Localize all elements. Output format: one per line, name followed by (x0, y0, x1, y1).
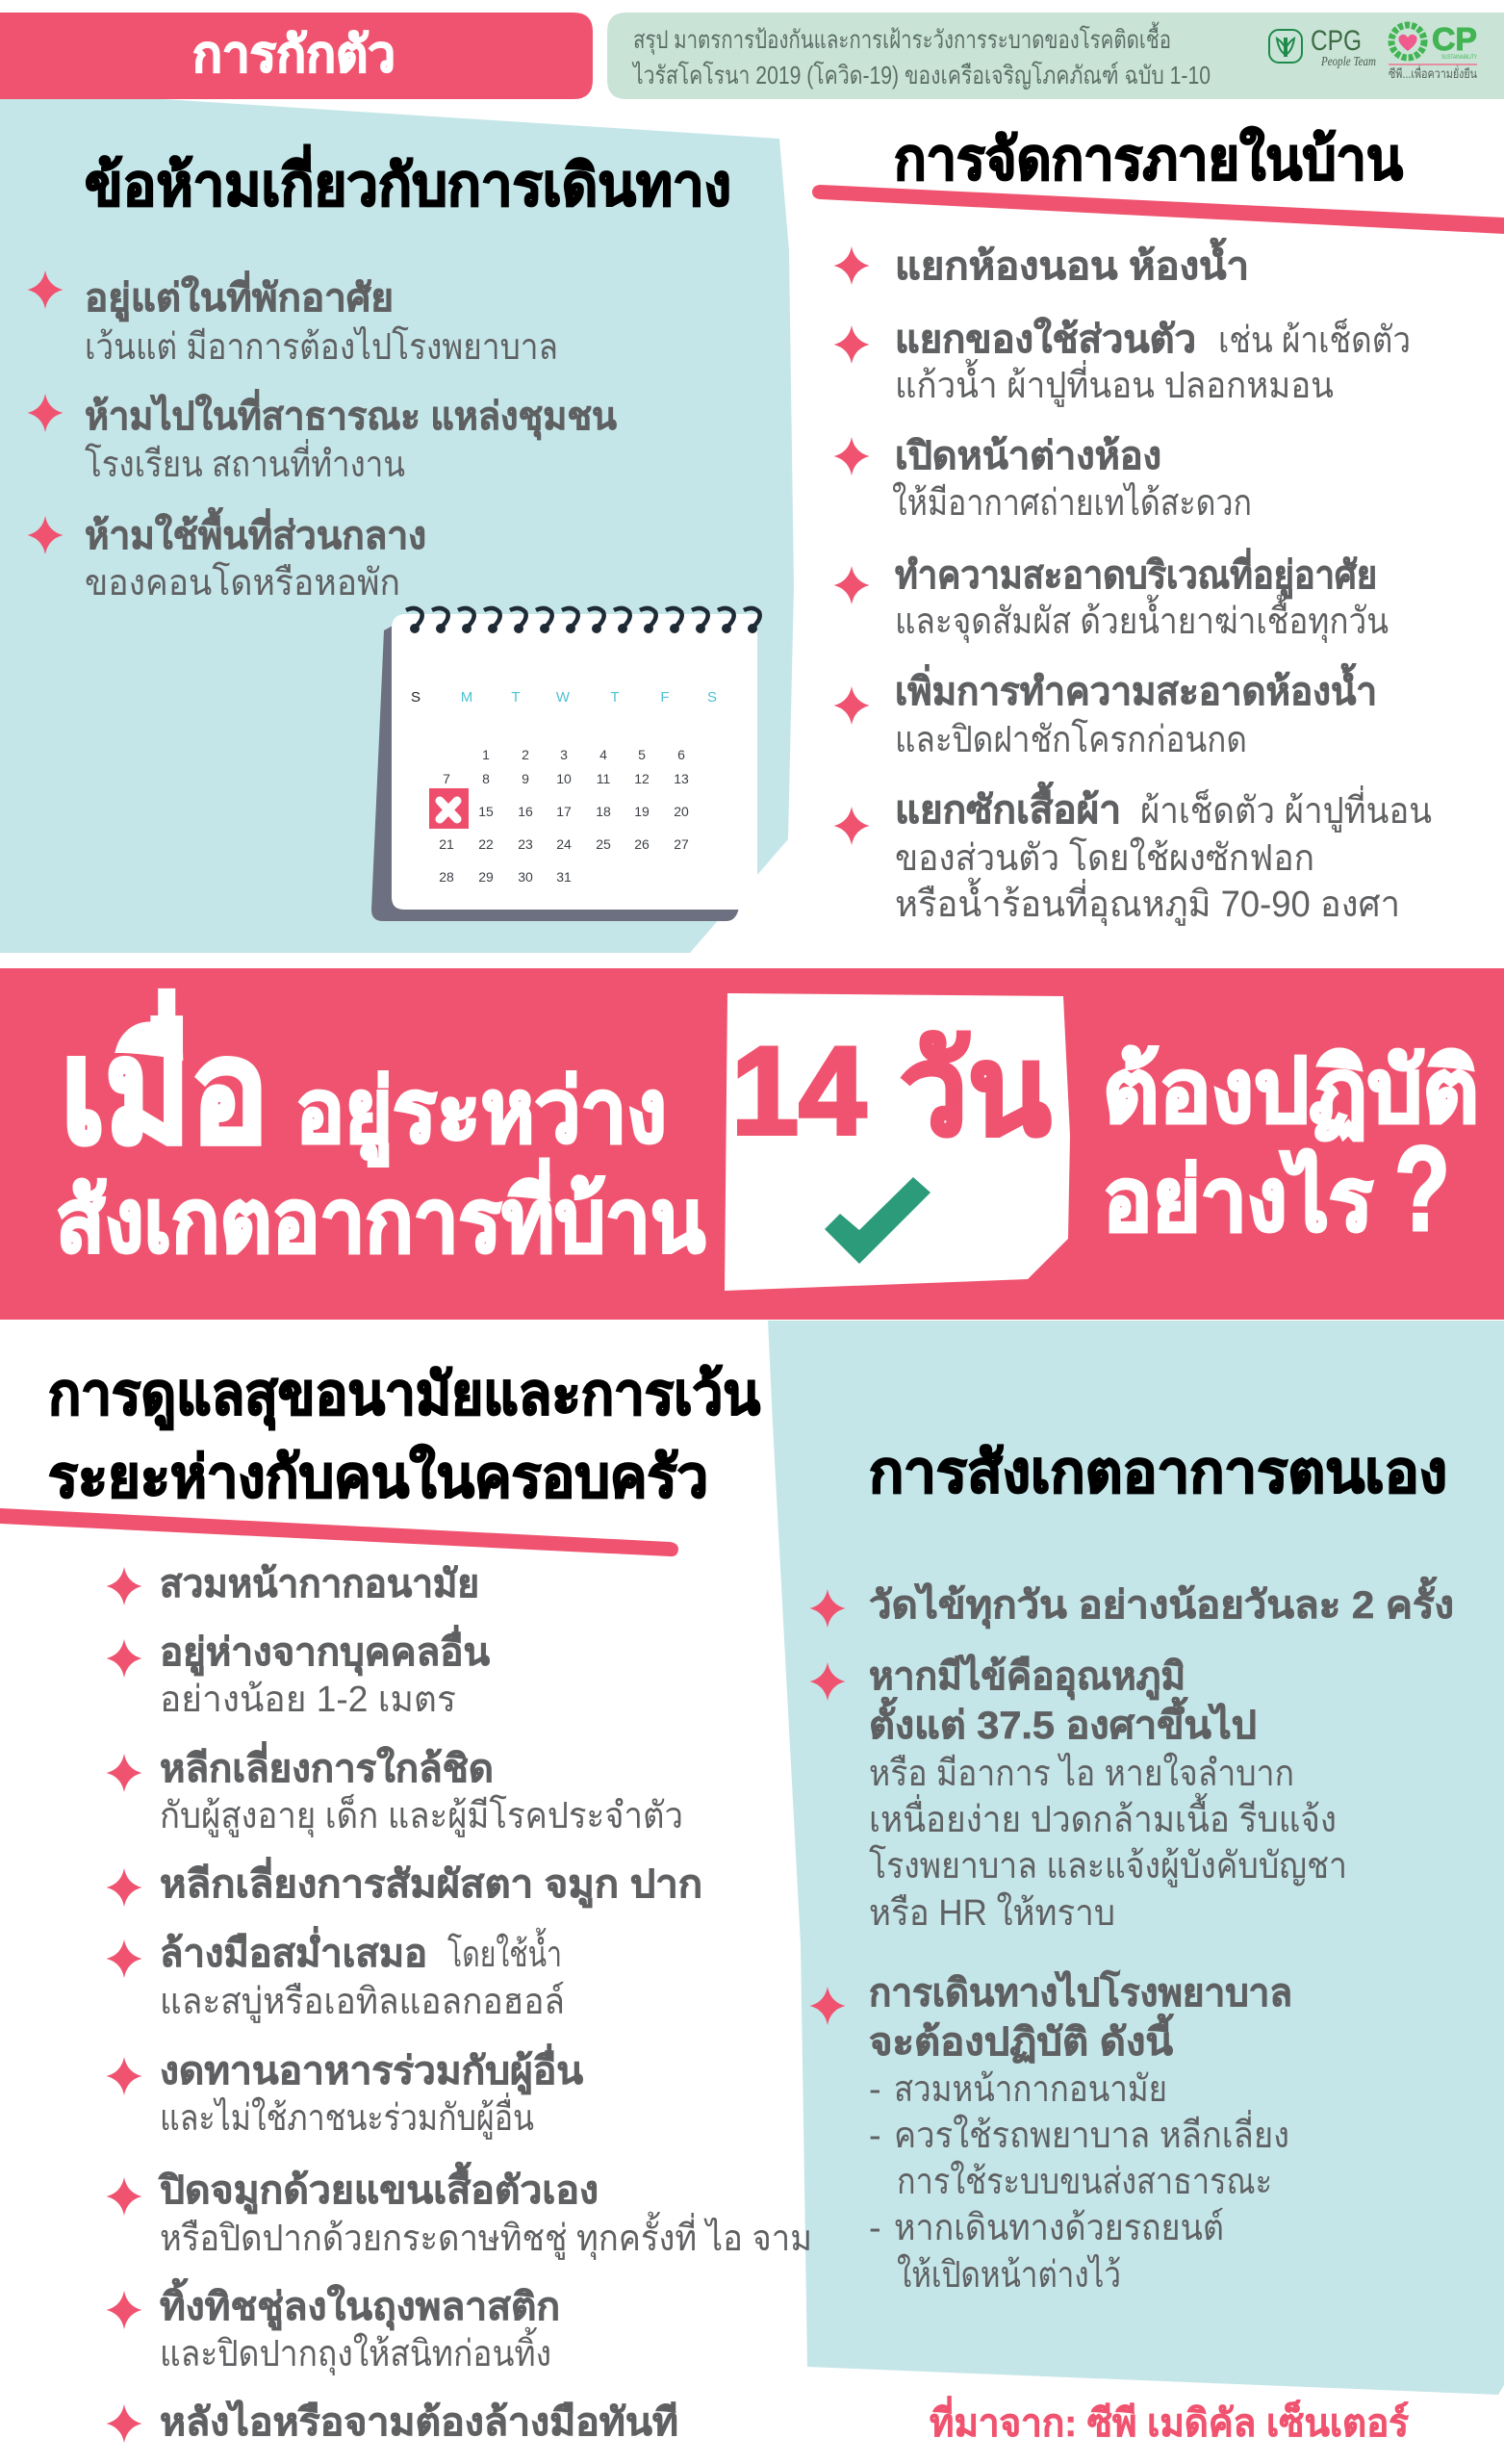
list item: wash hands (106, 1926, 565, 2023)
list item: separate belongings (833, 317, 1411, 407)
logo: CP for sustainability (1389, 21, 1477, 81)
calendar rings (406, 608, 760, 628)
list item: stay home (27, 270, 558, 368)
calendar weekday labels: M (461, 689, 472, 706)
list item: hospital travel: การเดินทางไปโรงพยาบาล (869, 1970, 1292, 2015)
list item: separate laundry: ผ้าเช็ดตัว ผ้าปูที่นอน (1140, 785, 1432, 833)
logo: CPG People Team: People Team (1320, 55, 1376, 69)
list item: measure temperature (810, 1577, 1454, 1630)
banner headline left: อยู่ระหว่าง (295, 1063, 667, 1167)
list item: wash hands: ล้างมือสม่ำเสมอ (160, 1926, 427, 1975)
calendar dates: 1 (482, 747, 490, 762)
list item: fever guidance: โรงพยาบาล และแจ้งผู้บังคับบัญชา (869, 1844, 1347, 1887)
list item: no common areas (27, 507, 426, 603)
list item: clean residence: ทำความสะอาดบริเวณที่อยู่อาศัย (895, 548, 1377, 599)
calendar dates: 21 (439, 836, 454, 852)
calendar dates: 15 (478, 804, 494, 819)
list item: fever guidance: หากมีไข้คืออุณหภูมิ (869, 1654, 1185, 1701)
calendar dates: 27 (674, 836, 689, 852)
list item: separate rooms (833, 238, 1249, 288)
panel: travel restrictions (0, 99, 794, 953)
heading: hygiene and distancing: การดูแลสุขอนามัยและการเว้น (48, 1362, 760, 1430)
list item: hospital travel: ให้เปิดหน้าต่างไว้ (897, 2254, 1121, 2296)
logo: CPG People Team (1269, 25, 1376, 69)
summary text: ไวรัสโคโรนา 2019 (โควิด-19) ของเครือเจริญโภคภัณฑ์ ฉบับ 1-10 (631, 61, 1211, 90)
banner headline left: เมื่อ (61, 990, 268, 1172)
list item: no public places: ห้ามไปในที่สาธารณะ แหล่งชุมชน (85, 389, 617, 441)
banner headline right: อย่างไร (1103, 1149, 1373, 1249)
heading underline (812, 185, 1504, 234)
list item: open windows (833, 435, 1252, 524)
list item: measure temperature: วัดไข้ทุกวัน อย่างน้อยวันละ 2 ครั้ง (869, 1577, 1454, 1630)
list item: fever guidance (810, 1654, 1347, 1934)
summary text (631, 21, 1211, 90)
banner headline right (1103, 1042, 1479, 1256)
calendar dates: 22 (478, 836, 494, 852)
banner headline right: ต้องปฏิบัติ (1103, 1042, 1479, 1142)
calendar dates: 7 (443, 771, 450, 786)
calendar crossed date (429, 788, 469, 829)
logo: CP for sustainability: SUSTAINABILITY (1441, 55, 1477, 61)
calendar weekday labels: W (556, 689, 571, 706)
calendar dates: 3 (560, 747, 568, 762)
calendar dates: 10 (556, 771, 572, 786)
topic title: การกักตัว (192, 27, 395, 83)
list item: stay home: อยู่แต่ในที่พักอาศัย (85, 270, 394, 321)
heading: travel restrictions: ข้อห้ามเกี่ยวกับการเดินทาง (85, 144, 731, 218)
list item: stay home: เว้นแต่ มีอาการต้องไปโรงพยาบาล (85, 325, 558, 368)
logo: CPG People Team: CPG (1311, 25, 1362, 57)
list item: clean residence (833, 548, 1389, 643)
calendar weekday labels: T (511, 689, 521, 706)
list item: dispose tissue: ทิ้งทิชชู่ลงในถุงพลาสติก (160, 2278, 560, 2331)
calendar dates: 20 (674, 804, 689, 819)
list item: clean bathroom (833, 663, 1377, 760)
heading: hygiene and distancing (48, 1362, 760, 1509)
list item: wash hands: และสบู่หรือเอทิลแอลกอฮอล์ (160, 1981, 565, 2023)
calendar weekday labels: F (660, 689, 670, 706)
header bar: topic label (0, 13, 593, 99)
list item: separate laundry (833, 782, 1432, 926)
summary text: สรุป มาตรการป้องกันและการเฝ้าระวังการระบาดของโรคติดเชื้อ (633, 21, 1171, 55)
note card: 14 days: 14 วัน (731, 1020, 1051, 1161)
calendar dates: 17 (556, 804, 572, 819)
list item: wash hands: โดยใช้น้ำ (447, 1927, 562, 1975)
calendar dates: 19 (634, 804, 650, 819)
list item: avoid close contact: หลีกเลี่ยงการใกล้ชิด (160, 1741, 494, 1790)
heading underline (0, 1508, 678, 1556)
calendar dates: 18 (596, 804, 611, 819)
list item: open windows: ให้มีอากาศถ่ายเทได้สะดวก (892, 482, 1252, 524)
list item: dispose tissue: และปิดปากถุงให้สนิทก่อนทิ้ง (160, 2326, 551, 2375)
header bar: summary and logos (607, 13, 1504, 99)
list item: separate rooms: แยกห้องนอน ห้องน้ำ (895, 238, 1249, 288)
calendar dates: 24 (556, 836, 572, 852)
list item: separate belongings: แยกของใช้ส่วนตัว (895, 317, 1196, 361)
list item: cover nose: ปิดจมูกด้วยแขนเสื้อตัวเอง (158, 2162, 599, 2214)
list item: hospital travel (810, 1970, 1292, 2296)
list item: separate belongings: แก้วน้ำ ผ้าปูที่นอน ปลอกหมอน (895, 358, 1334, 407)
calendar dates: 30 (518, 869, 533, 885)
calendar weekday labels (411, 689, 717, 706)
list item: no common areas: ห้ามใช้พื้นที่ส่วนกลาง (85, 507, 426, 557)
source credit: ที่มาจาก: ซีพี เมดิคัล เซ็นเตอร์ (930, 2396, 1409, 2445)
banner headline right: ? (1394, 1122, 1450, 1256)
calendar dates: 8 (482, 771, 490, 786)
calendar illustration (371, 608, 760, 921)
list item: fever guidance: หรือ HR ให้ทราบ (869, 1892, 1115, 1934)
list item: hospital travel: การใช้ระบบขนส่งสาธารณะ (897, 2161, 1272, 2202)
list item: clean residence: และจุดสัมผัส ด้วยน้ำยาฆ่าเชื้อทุกวัน (895, 594, 1389, 643)
list item: fever guidance: เหนื่อยง่าย ปวดกล้ามเนื้อ รีบแจ้ง (869, 1792, 1337, 1840)
calendar dates: 12 (634, 771, 650, 786)
list item: clean bathroom: และปิดฝาชักโครกก่อนกด (895, 718, 1247, 760)
list item: hospital travel: - (869, 2069, 881, 2110)
list item: separate laundry: หรือน้ำร้อนที่อุณหภูมิ 70-90 องศา (895, 877, 1400, 926)
calendar dates: 29 (478, 869, 494, 885)
list item: separate laundry: แยกซักเสื้อผ้า (895, 782, 1121, 832)
heading: hygiene and distancing: ระยะห่างกับคนในครอบครัว (48, 1444, 708, 1509)
calendar dates (439, 747, 689, 885)
calendar weekday labels: S (707, 689, 717, 706)
list item: hospital travel: หากเดินทางด้วยรถยนต์ (894, 2207, 1224, 2248)
calendar dates: 31 (556, 869, 572, 885)
list item: open windows: เปิดหน้าต่างห้อง (895, 435, 1161, 477)
list item: no common areas: ของคอนโดหรือหอพัก (85, 561, 400, 603)
list item: no public places: โรงเรียน สถานที่ทำงาน (85, 439, 405, 485)
calendar dates: 28 (439, 869, 454, 885)
calendar dates: 4 (599, 747, 607, 762)
banner headline left: สังเกตอาการที่บ้าน (56, 1158, 705, 1270)
panel: hygiene and family distancing (0, 1362, 812, 2444)
list item: fever guidance: หรือ มีอาการ ไอ หายใจลำบาก (869, 1753, 1294, 1794)
list item: no public places (27, 389, 617, 485)
calendar dates: 16 (518, 804, 533, 819)
list item: wash after coughing: หลังไอหรือจามต้องล้างมือทันที (160, 2400, 678, 2444)
list item: keep distance: อย่างน้อย 1-2 เมตร (160, 1680, 456, 1720)
calendar dates: 23 (518, 836, 533, 852)
list item: separate belongings: เช่น ผ้าเช็ดตัว (1218, 318, 1411, 361)
panel: self monitoring (768, 1321, 1504, 2395)
list item: cover nose (106, 2162, 812, 2260)
list item: avoid close contact: กับผู้สูงอายุ เด็ก และผู้มีโรคประจำตัว (160, 1793, 683, 1837)
list item: cover nose: หรือปิดปากด้วยกระดาษทิชชู่ ทุกครั้งที่ ไอ จาม (160, 2211, 812, 2260)
list item: wear mask: สวมหน้ากากอนามัย (160, 1563, 479, 1605)
calendar dates: 25 (596, 836, 611, 852)
calendar dates: 26 (634, 836, 650, 852)
icon: check mark (825, 1177, 930, 1264)
banner headline left (56, 990, 705, 1270)
list item: dispose tissue (106, 2278, 560, 2375)
central banner (0, 968, 1504, 1320)
list item: hospital travel: - (869, 2116, 881, 2156)
logo: CP for sustainability: ซีพี...เพื่อความยั่งยืน (1389, 65, 1477, 81)
list item: separate laundry: ของส่วนตัว โดยใช้ผงซักฟอก (895, 836, 1314, 879)
calendar weekday labels: T (610, 689, 620, 706)
calendar dates: 13 (674, 771, 689, 786)
calendar dates: 11 (597, 771, 610, 786)
list item: clean bathroom: เพิ่มการทำความสะอาดห้องน้ำ (895, 663, 1377, 713)
list item: keep distance (106, 1625, 490, 1720)
list item: fever guidance: ตั้งแต่ 37.5 องศาขึ้นไป (869, 1697, 1257, 1747)
list item: hospital travel: สวมหน้ากากอนามัย (894, 2069, 1167, 2110)
calendar dates: 9 (522, 771, 529, 786)
list item: avoid close contact (106, 1741, 683, 1837)
list item: no shared meals: งดทานอาหารร่วมกับผู้อื่น (160, 2043, 583, 2094)
calendar dates: 2 (522, 747, 529, 762)
panel: home management (812, 126, 1504, 926)
calendar dates: 6 (677, 747, 685, 762)
logo: CP for sustainability: CP (1432, 21, 1477, 57)
list item: hospital travel: - (869, 2208, 881, 2248)
list item: hospital travel: จะต้องปฏิบัติ ดังนี้ (869, 2014, 1175, 2064)
calendar dates: 5 (638, 747, 646, 762)
heading: self monitoring: การสังเกตอาการตนเอง (869, 1440, 1447, 1504)
note card: 14 days (725, 993, 1070, 1291)
list item: avoid touching face: หลีกเลี่ยงการสัมผัสตา จมูก ปาก (160, 1857, 702, 1908)
list item: hospital travel: ควรใช้รถพยาบาล หลีกเลี่ยง (894, 2110, 1289, 2156)
list item: no shared meals (106, 2043, 583, 2140)
list item: no shared meals: และไม่ใช้ภาชนะร่วมกับผู้อื่น (160, 2092, 534, 2140)
list item: keep distance: อยู่ห่างจากบุคคลอื่น (160, 1625, 490, 1677)
heading: home management: การจัดการภายในบ้าน (894, 126, 1403, 192)
calendar weekday labels: S (411, 689, 421, 706)
